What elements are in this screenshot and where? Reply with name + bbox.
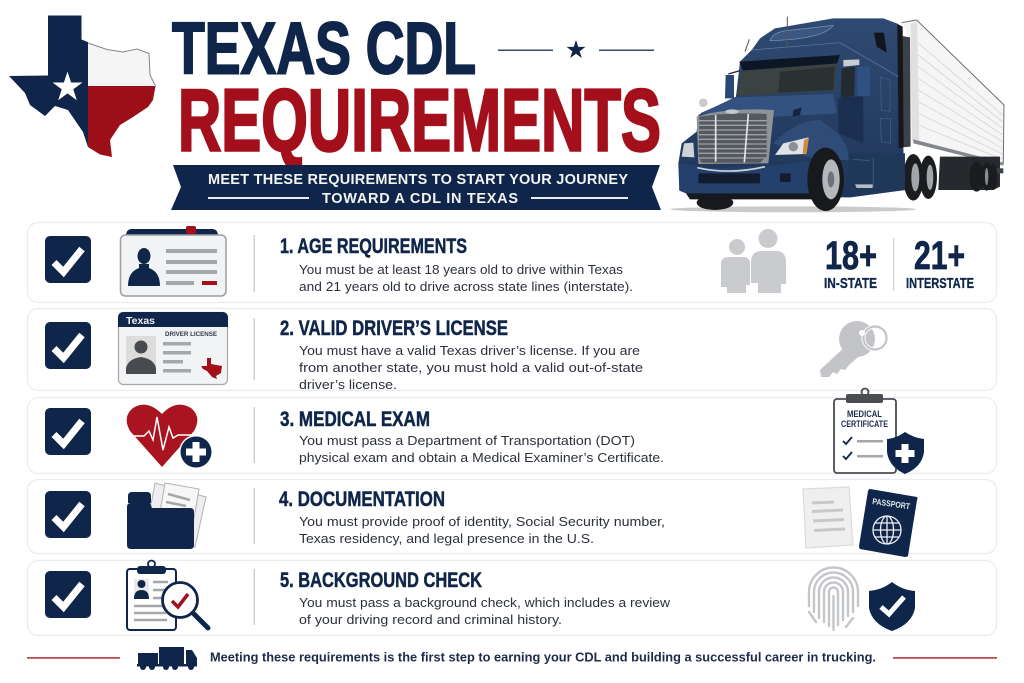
- text: background description: [299, 595, 671, 627]
- text: background description: of your driving record and criminal history.: [299, 612, 562, 627]
- text: documentation description: You must provide proof of identity, Social Security number,: [299, 514, 665, 529]
- panel: requirement 1, age: [28, 222, 996, 302]
- icon: medical certificate with shield: [834, 388, 924, 474]
- icon: shield with check: [869, 582, 915, 631]
- stat: 18+ in-state: IN-STATE: [824, 275, 877, 292]
- icon: medical certificate with shield: CERTIFICATE: [841, 419, 888, 430]
- checkbox 4: [45, 491, 91, 538]
- stat: 21+ interstate: INTERSTATE: [906, 275, 974, 292]
- text: background description: You must pass a background check, which includes a review: [299, 595, 671, 610]
- text: documentation description: Texas residency, and legal presence in the U.S.: [299, 531, 594, 546]
- subtitle ribbon: [171, 165, 661, 210]
- stat: 18+ in-state: [824, 234, 877, 292]
- panel: requirement 4, documentation: [28, 480, 996, 557]
- icon: small truck: [137, 647, 197, 670]
- stat: 21+ interstate: [906, 234, 974, 292]
- icon: two people: [721, 229, 786, 293]
- icon: heart with pulse and plus: [127, 405, 213, 469]
- icon: fingerprint: [809, 568, 858, 630]
- icon: key: [820, 321, 886, 377]
- truck illustration: [670, 17, 1004, 212]
- icon: clipboard with magnifier: [127, 560, 208, 630]
- icon: ID badge: [120, 226, 226, 296]
- footer: [27, 647, 997, 670]
- text: documentation description: [299, 514, 665, 546]
- icon: medical certificate with shield: MEDICAL: [847, 409, 882, 420]
- heading: background check: 5. BACKGROUND CHECK: [280, 569, 482, 592]
- icon: passport: PASSPORT: [872, 496, 911, 511]
- icon: paper document: [803, 487, 853, 548]
- Texas flag map: [9, 16, 156, 157]
- text: license description: You must have a valid Texas driver’s license. If you are: [299, 343, 640, 358]
- checkbox 5: [45, 571, 91, 618]
- panel: requirement 2, license: [28, 308, 996, 392]
- checkbox 3: [45, 408, 91, 455]
- checkbox 1: [45, 236, 91, 283]
- text: age description: You must be at least 18 years old to drive within Texas: [299, 262, 624, 277]
- text: license description: driver’s license.: [299, 377, 397, 392]
- text: age description: and 21 years old to drive across state lines (interstate).: [299, 279, 633, 294]
- panel: requirement 5, background check: [28, 560, 996, 636]
- decorative star divider: [498, 40, 654, 58]
- icon: Texas driver license: DRIVER LICENSE: [165, 331, 218, 338]
- heading: medical exam: 3. MEDICAL EXAM: [280, 408, 430, 431]
- heading: valid driver's license: 2. VALID DRIVER’S LICENSE: [280, 317, 508, 340]
- icon: Texas driver license: Texas: [126, 315, 155, 327]
- heading: documentation: 4. DOCUMENTATION: [279, 488, 445, 511]
- subtitle ribbon: TOWARD A CDL IN TEXAS: [322, 191, 518, 207]
- text: medical description: [299, 433, 664, 465]
- title: Requirements: REQUIREMENTS: [178, 70, 661, 170]
- subtitle ribbon: MEET THESE REQUIREMENTS TO START YOUR JOURNEY: [208, 172, 628, 188]
- text: medical description: You must pass a Department of Transportation (DOT): [299, 433, 635, 448]
- text: age description: [299, 262, 633, 294]
- panel: requirement 3, medical: [28, 388, 996, 474]
- text: license description: from another state, you must hold a valid out-of-state: [299, 360, 643, 375]
- title: Texas CDL: TEXAS CDL: [172, 8, 476, 90]
- icon: folder with documents: [127, 483, 206, 549]
- heading: age requirements: 1. AGE REQUIREMENTS: [280, 235, 467, 258]
- footer message: Meeting these requirements is the first step to earning your CDL and building a successful career in trucking.: [210, 650, 876, 664]
- stat: 18+ in-state: 18+: [825, 234, 877, 278]
- text: medical description: physical exam and obtain a Medical Examiner’s Certificate.: [299, 450, 664, 465]
- checkbox 2: [45, 322, 91, 369]
- icon: Texas driver license: [118, 312, 228, 384]
- stat: 21+ interstate: 21+: [914, 234, 965, 278]
- text: license description: [299, 343, 643, 392]
- icon: passport: [859, 489, 918, 557]
